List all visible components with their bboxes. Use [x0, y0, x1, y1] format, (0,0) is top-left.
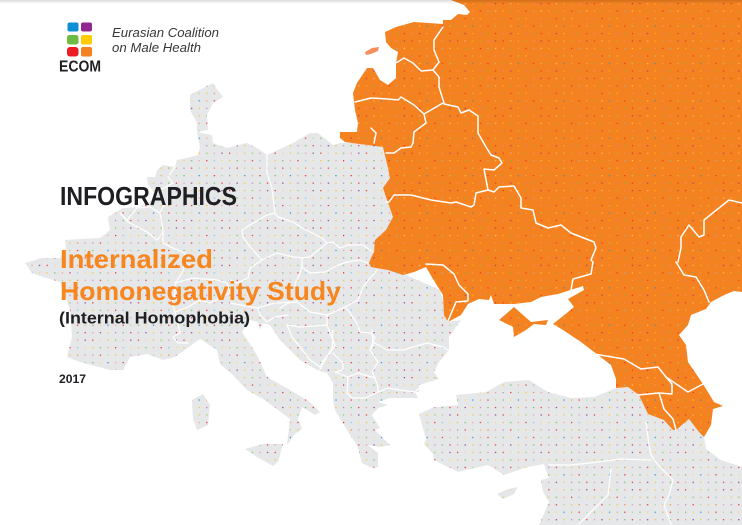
organisation name: on Male Health — [112, 40, 201, 55]
logo: ECOM — [59, 22, 101, 76]
island: Saaremaa — [365, 47, 379, 55]
logo coloured squares — [67, 22, 92, 56]
organisation name: Eurasian Coalition — [112, 25, 219, 40]
title: Internalized Homonegativity Study: Homonegativity Study — [60, 276, 342, 306]
year: 2017 — [59, 372, 86, 386]
title: Internalized Homonegativity Study: Internalized — [60, 244, 213, 274]
organisation name — [112, 25, 219, 55]
logo wordmark: ECOM — [59, 58, 101, 76]
heading: INFOGRAPHICS: INFOGRAPHICS — [60, 181, 237, 211]
title: Internalized Homonegativity Study — [60, 244, 342, 306]
map: highlighted EECA region in orange — [340, 0, 742, 437]
subtitle: (Internal Homophobia) — [59, 308, 250, 328]
